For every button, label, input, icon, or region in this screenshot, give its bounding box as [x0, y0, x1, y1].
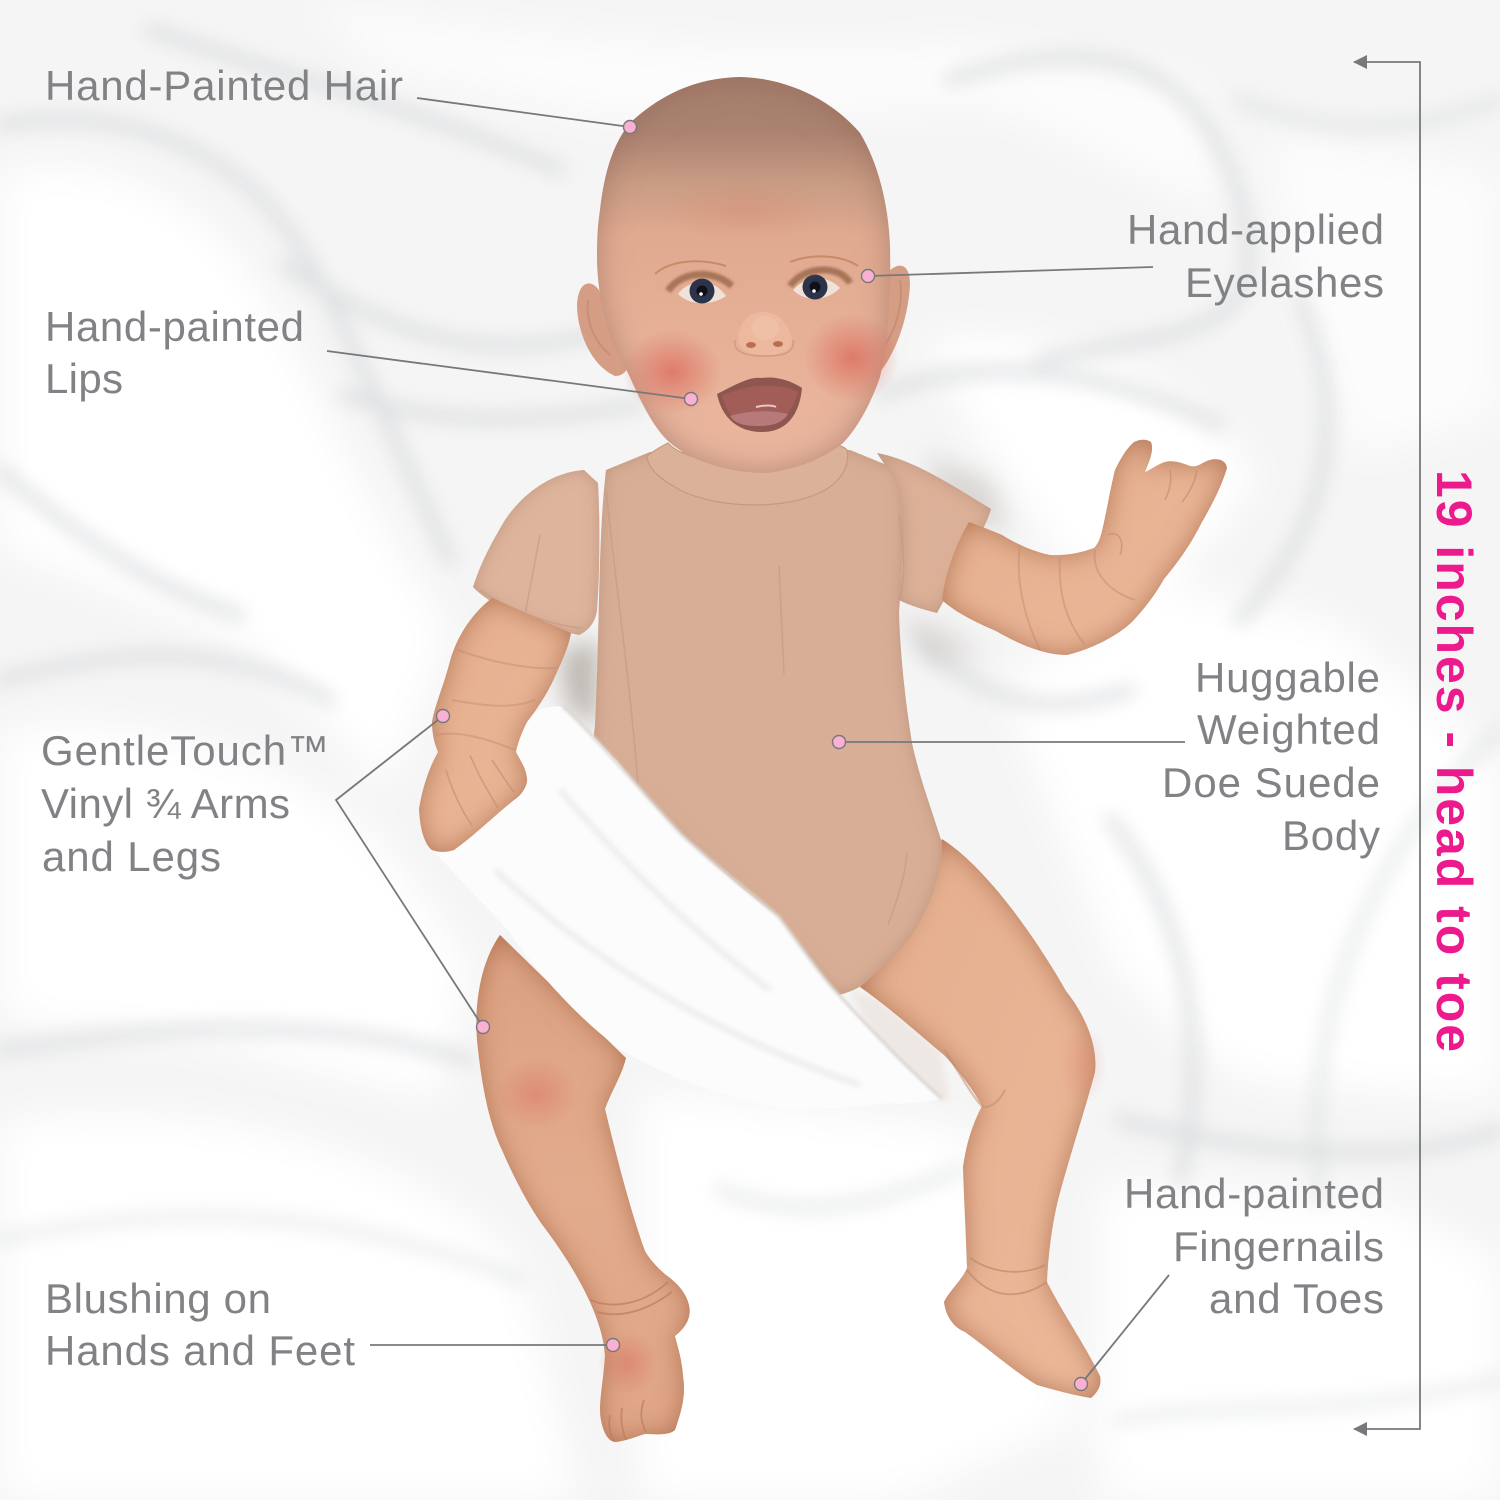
blanket drape over waist — [427, 706, 942, 1109]
ear left — [577, 283, 627, 376]
arrow: height bracket — [1353, 55, 1420, 1436]
callout: Blushing on Hands and Feet: Hands and Feet — [45, 1327, 355, 1374]
callout: Hand-painted Lips: Hand-painted — [45, 303, 304, 350]
callout: GentleTouch Vinyl Arms and Legs: Vinyl ¾ Arms — [41, 780, 290, 827]
sleeve: viewer's right — [877, 453, 991, 613]
nose — [735, 312, 793, 356]
callout: Hand-Painted Hair — [45, 62, 636, 134]
callout: Huggable Weighted Doe Suede Body: Weighted — [1197, 706, 1380, 753]
callout: Blushing on Hands and Feet: Blushing on — [45, 1275, 271, 1322]
sleeve: viewer's left — [473, 470, 599, 635]
soft shadows around doll — [560, 455, 1010, 730]
callout: Hand-painted Lips: Lips — [45, 355, 123, 402]
ear right — [865, 266, 910, 376]
callout: Hand-applied Eyelashes — [862, 206, 1384, 306]
callout: Hand-painted Lips — [45, 303, 698, 406]
callout: Huggable Weighted Doe Suede Body: Body — [1282, 812, 1380, 859]
body: doe suede — [473, 443, 991, 995]
doll — [419, 77, 1227, 1442]
callout: Huggable Weighted Doe Suede Body: Doe Suede — [1162, 759, 1380, 806]
callout: Hand-Painted Hair: Hand-Painted Hair — [45, 62, 403, 109]
face shape — [597, 77, 890, 473]
collar — [647, 443, 848, 505]
callout: GentleTouch Vinyl Arms and Legs: GentleTouch™ — [41, 727, 329, 774]
callout: Blushing on Hands and Feet — [45, 1275, 620, 1374]
callout: Huggable Weighted Doe Suede Body — [832, 654, 1380, 859]
callout: GentleTouch Vinyl Arms and Legs — [41, 710, 490, 1034]
leg: viewer's right — [860, 839, 1107, 1398]
mouth — [717, 377, 802, 432]
callout: Hand-painted Fingernails and Toes: Fingernails — [1173, 1223, 1384, 1270]
head — [577, 77, 910, 473]
callout: Huggable Weighted Doe Suede Body: Huggable — [1195, 654, 1380, 701]
callout: Hand-applied Eyelashes: Eyelashes — [1185, 259, 1384, 306]
callout: Hand-painted Fingernails and Toes: Hand-painted — [1124, 1170, 1384, 1217]
blanket crumple under crotch — [850, 990, 950, 1100]
leg: viewer's left — [476, 935, 690, 1442]
arm: viewer's right with open hand — [942, 440, 1227, 655]
callout: Hand-painted Fingernails and Toes — [1074, 1170, 1384, 1390]
arm: viewer's left with fist — [419, 598, 571, 852]
callout: Hand-painted Fingernails and Toes: and Toes — [1209, 1275, 1384, 1322]
callout: GentleTouch Vinyl Arms and Legs: and Legs — [42, 833, 221, 880]
callout: Hand-applied Eyelashes: Hand-applied — [1127, 206, 1384, 253]
height label: 19 inches - head to toe — [1426, 470, 1482, 1052]
eyes — [655, 256, 858, 304]
